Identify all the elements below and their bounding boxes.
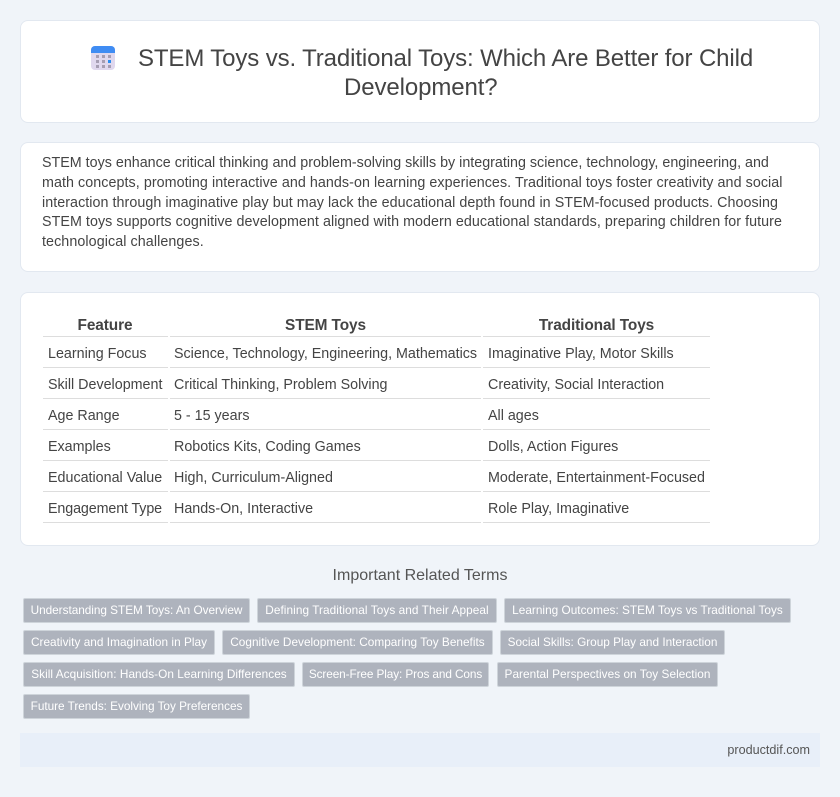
text block: summary: math concepts, promoting interactive and hands-on learning experiences. Traditional toys foster creativity and social <box>42 175 783 191</box>
title: STEM Toys vs. Traditional Toys: Which Are Better for Child <box>138 45 753 72</box>
table header: traditional toys: Traditional Toys <box>539 317 654 334</box>
heading: important related terms: Important Related Terms <box>333 567 507 584</box>
table: Learning Focus <box>48 346 147 362</box>
related term tags: Cognitive Development: Comparing Toy Benefits <box>230 635 485 649</box>
table: Examples <box>48 439 111 455</box>
table <box>43 317 710 523</box>
related term tags: Skill Acquisition: Hands-On Learning Differences <box>31 667 287 681</box>
table: Hands-On, Interactive <box>174 501 313 517</box>
table: Engagement Type <box>48 501 162 517</box>
related term tags: Learning Outcomes: STEM Toys vs Traditional Toys <box>512 603 783 617</box>
table: Educational Value <box>48 470 162 486</box>
panel: intro summary <box>20 142 820 272</box>
table: Critical Thinking, Problem Solving <box>174 377 387 393</box>
table header: feature: Feature <box>78 317 132 334</box>
title <box>138 45 753 101</box>
table: Science, Technology, Engineering, Mathematics <box>174 346 477 362</box>
related term tags: Defining Traditional Toys and Their Appeal <box>265 603 489 617</box>
table: 5 - 15 years <box>174 408 250 424</box>
footer bar <box>20 733 820 767</box>
table: Age Range <box>48 408 120 424</box>
table: Robotics Kits, Coding Games <box>174 439 361 455</box>
related term tags: Creativity and Imagination in Play <box>31 635 207 649</box>
related term tags: Parental Perspectives on Toy Selection <box>505 667 710 681</box>
related term tags: Future Trends: Evolving Toy Preferences <box>31 699 242 713</box>
table: Creativity, Social Interaction <box>488 377 664 393</box>
table: All ages <box>488 408 539 424</box>
table: Skill Development <box>48 377 162 393</box>
panel: title header <box>20 20 820 123</box>
related term tags <box>23 598 791 719</box>
text block: summary: technological challenges. <box>42 234 204 250</box>
table: Role Play, Imaginative <box>488 501 629 517</box>
table: Moderate, Entertainment-Focused <box>488 470 705 486</box>
panel: comparison table <box>20 292 820 546</box>
text block: summary: interaction through imaginative play but may lack the educational depth found in STEM-focused products. Choosing <box>42 195 778 211</box>
table: High, Curriculum-Aligned <box>174 470 333 486</box>
related term tags: Screen-Free Play: Pros and Cons <box>309 667 482 681</box>
footer source text: productdif.com <box>727 743 810 757</box>
title: Development? <box>344 74 498 101</box>
related term tags: Social Skills: Group Play and Interaction <box>508 635 717 649</box>
table: Imaginative Play, Motor Skills <box>488 346 674 362</box>
icon: calendar abacus <box>91 46 115 70</box>
table header: STEM toys: STEM Toys <box>285 317 366 334</box>
text block: summary: STEM toys supports cognitive development aligned with modern educational standards, preparing children for future <box>42 214 782 230</box>
text block: summary: STEM toys enhance critical thinking and problem-solving skills by integrating science, technology, engineering, and <box>42 155 769 171</box>
related term tags: Understanding STEM Toys: An Overview <box>31 603 242 617</box>
table: Dolls, Action Figures <box>488 439 618 455</box>
text block: summary <box>42 155 783 250</box>
